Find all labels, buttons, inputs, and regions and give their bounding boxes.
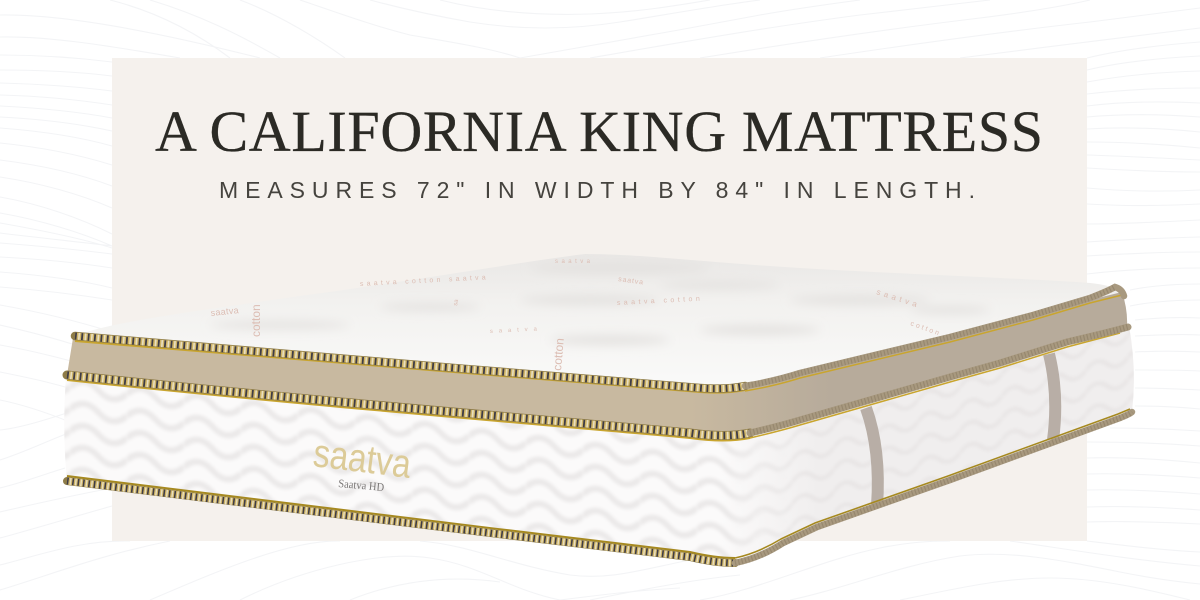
tufting shadows	[235, 296, 971, 346]
printed logos on top surface: saatva	[555, 259, 591, 265]
piping: middle side	[750, 327, 1128, 438]
printed logos on top surface: cotton	[249, 304, 263, 337]
piping: bottom side	[735, 409, 1132, 563]
mattress body base	[64, 326, 1134, 563]
piping: top side	[745, 287, 1124, 391]
printed logos on top surface: saatva cotton	[617, 296, 700, 307]
printed logos on top surface: saatva cotton saatva	[360, 274, 486, 288]
printed logos on top surface: cotton	[909, 320, 940, 337]
printed logos on top surface: cotton	[550, 337, 567, 371]
handle: rear	[1049, 354, 1055, 440]
printed logos on top surface: sa	[453, 298, 460, 306]
model name: Saatva HD	[338, 478, 385, 494]
piping: middle front	[67, 375, 750, 440]
pillow top band	[67, 292, 1127, 436]
printed logos on top surface: saatva	[490, 327, 538, 335]
printed logos on top surface: saatva	[618, 276, 644, 286]
piping: bottom front	[67, 476, 735, 563]
printed logos on top surface: saatva	[210, 305, 239, 318]
handle: front	[866, 408, 878, 506]
beige background panel	[112, 58, 1087, 541]
saatva logo: saatva	[311, 431, 414, 487]
piping: top front	[75, 336, 745, 393]
printed logos on top surface: saatva	[875, 287, 919, 309]
subtitle: MEASURES 72" IN WIDTH BY 84" IN LENGTH.	[219, 177, 975, 203]
mattress top surface	[75, 254, 1122, 388]
printed logos on top surface	[210, 259, 940, 371]
quilted waves	[64, 382, 811, 556]
mattress illustration	[60, 254, 1140, 570]
title: A CALIFORNIA KING MATTRESS	[155, 99, 1043, 164]
